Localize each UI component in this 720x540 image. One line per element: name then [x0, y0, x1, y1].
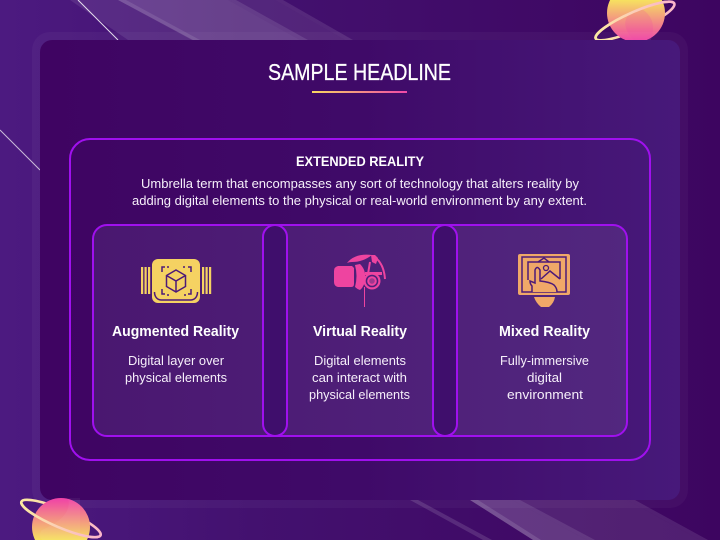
title underline	[312, 91, 407, 93]
text: mixed reality description: environment	[507, 388, 584, 402]
heading: mixed reality: Mixed Reality	[499, 324, 590, 340]
text: augmented reality description: Digital layer over	[128, 354, 224, 368]
planet: bottom left	[20, 498, 102, 540]
text: augmented reality description	[125, 354, 227, 385]
main panel	[40, 40, 680, 500]
icon: augmented reality cube	[141, 259, 211, 303]
top diagonal light beams	[70, 0, 353, 40]
text: mixed reality description	[500, 354, 589, 402]
icon: mixed reality touchscreen	[518, 254, 570, 307]
divider pill: right	[433, 225, 457, 436]
description: Umbrella term that encompasses any sort of technology that alters reality by	[141, 177, 580, 191]
outer outline	[70, 139, 650, 460]
heading: virtual reality: Virtual Reality	[313, 324, 407, 340]
text: mixed reality description: digital	[527, 371, 562, 385]
panel: extended reality	[70, 139, 650, 460]
icon: virtual reality headset	[334, 255, 385, 307]
text: virtual reality description: can interact with	[312, 371, 407, 385]
text: augmented reality description: physical elements	[125, 371, 227, 385]
left diagonal line	[0, 130, 40, 170]
text: mixed reality description: Fully-immersive	[500, 354, 589, 368]
heading: extended reality: EXTENDED REALITY	[296, 153, 425, 169]
text: virtual reality description	[309, 354, 410, 402]
description	[132, 177, 587, 208]
panel: three reality types	[93, 225, 627, 436]
description: adding digital elements to the physical or real-world environment by any extent.	[132, 194, 587, 208]
title: SAMPLE HEADLINE	[268, 59, 451, 85]
planet: top right	[594, 0, 676, 40]
divider pill: left	[263, 225, 287, 436]
heading: augmented reality: Augmented Reality	[112, 324, 239, 340]
bottom diagonal light beams	[410, 500, 708, 540]
text: virtual reality description: Digital elements	[314, 354, 406, 368]
text: virtual reality description: physical elements	[309, 388, 410, 402]
